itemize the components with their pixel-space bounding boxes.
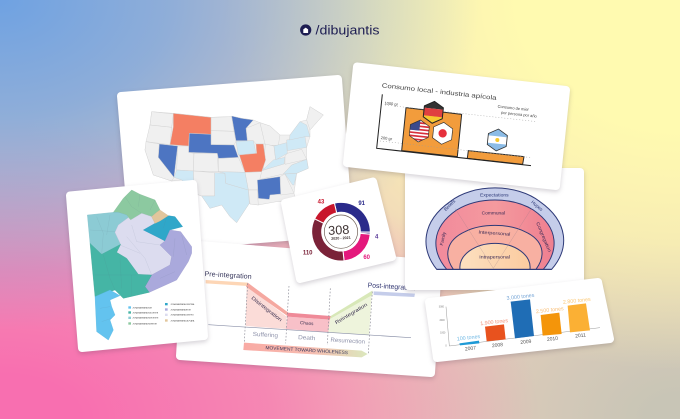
- card background: [405, 168, 584, 290]
- phase labels: Resurrection: [330, 338, 365, 346]
- icon: flag of Argentina: [486, 128, 508, 152]
- bar chart: [439, 293, 600, 353]
- value labels: 3.000 tones: [506, 293, 535, 302]
- phase labels: Pre-integration: [204, 271, 252, 281]
- map of the United States: [145, 107, 323, 223]
- panel: health regions map: [70, 184, 204, 348]
- ring labels: Hopes: [530, 200, 544, 213]
- value labels: 100 tones: [457, 334, 481, 343]
- map legend: ZONA SANITARIA LA PLATA: [171, 319, 195, 322]
- map legend: ZONA SANITARIA ESTE: [171, 308, 192, 311]
- card background: [347, 66, 566, 186]
- district boundaries: [90, 194, 187, 322]
- phase labels: Disintegration: [250, 296, 283, 323]
- arrow: movement toward wholeness: MOVEMENT TOWARD WHOLENESS: [265, 345, 348, 355]
- ring labels: Congregation: [535, 221, 552, 253]
- y axis labels: 0: [445, 346, 447, 348]
- phase labels: Suffering: [253, 332, 278, 339]
- ring labels: Communal: [482, 211, 505, 216]
- axis and note labels: 200 gr: [381, 135, 393, 141]
- phase labels: Reintegration: [334, 302, 369, 326]
- honey consumption chart: [377, 82, 538, 166]
- donut centre total: 308: [328, 223, 350, 238]
- arrow: movement toward wholeness: [243, 343, 368, 357]
- ring labels: Family: [439, 231, 447, 246]
- ring labels: [439, 192, 552, 260]
- consumption bars: [402, 108, 524, 164]
- donut value labels: 60: [363, 255, 371, 261]
- map legend: ZONA SANITARIA CENTRAL: [171, 303, 195, 306]
- y axis labels: 2000: [439, 320, 445, 322]
- panel: bar chart of yearly tonnes: [429, 282, 610, 358]
- icon: flag of the United States: [408, 119, 430, 143]
- ring labels: Interpersonal: [478, 230, 511, 237]
- panel: US map: [121, 79, 349, 249]
- card background: [70, 184, 204, 348]
- bars: [459, 299, 590, 345]
- card background: [285, 182, 392, 279]
- year labels: 2009: [520, 339, 532, 346]
- panel: donut chart: [285, 182, 392, 279]
- logo: /dibujantis: [300, 23, 380, 37]
- baseline and phase dividers: [208, 283, 411, 353]
- year labels: 2008: [492, 342, 504, 349]
- ring labels: Intrapersonal: [479, 255, 510, 260]
- map legend: ZONA SANITARIA NORESTE: [133, 322, 158, 325]
- donut segments: [312, 202, 370, 261]
- icon: logo badge: [300, 24, 311, 36]
- panel: local honey consumption: [347, 66, 566, 186]
- year labels: 2011: [575, 332, 586, 340]
- card background: [121, 79, 349, 249]
- phase labels: Chaos: [300, 320, 314, 326]
- donut chart: [303, 199, 379, 261]
- card background: [429, 282, 610, 358]
- y axis labels: 3000: [439, 307, 445, 309]
- process chart: [204, 271, 415, 357]
- axis and note labels: 1000 gr: [384, 100, 399, 107]
- panel: concentric circles: [405, 168, 584, 290]
- y axis labels: 1000: [440, 333, 446, 335]
- donut value labels: [303, 199, 379, 261]
- logo wordmark: /dibujantis: [316, 23, 380, 37]
- phase labels: Death: [298, 335, 316, 342]
- map legend: ZONA SANITARIA NOROESTE: [133, 317, 159, 320]
- phase bands: [206, 280, 415, 335]
- panel: integration process diagram: [180, 244, 438, 373]
- donut value labels: 110: [303, 250, 313, 256]
- year labels: 2007: [465, 345, 477, 353]
- icon: flag of Germany: [422, 100, 444, 125]
- year labels: [465, 332, 586, 353]
- year labels: 2010: [547, 336, 559, 343]
- donut value labels: 91: [358, 201, 366, 207]
- card background: [180, 244, 438, 373]
- value labels: 1.900 tones: [480, 318, 509, 327]
- phase labels: Post-integration: [368, 282, 415, 292]
- donut centre total: 2020 - 2021: [331, 236, 351, 241]
- chart title: Consumo local - industria apícola: [381, 82, 497, 102]
- axis and note labels: [381, 100, 538, 141]
- value labels: 2.500 tones: [536, 306, 564, 315]
- axis and note labels: Consumo de miel: [497, 104, 529, 112]
- chart axes: [446, 307, 600, 346]
- concentric dome diagram: [426, 188, 564, 269]
- value labels: 2.800 tones: [563, 297, 591, 306]
- regional map: [87, 190, 195, 340]
- donut centre total: [324, 215, 358, 248]
- map legend: ZONA SANITARIA SUR: [133, 306, 153, 309]
- map legend: ZONA SANITARIA CENTRO: [171, 314, 194, 317]
- phase labels: [204, 271, 415, 346]
- donut value labels: 43: [318, 199, 325, 205]
- axis and note labels: por persona por año: [501, 110, 538, 119]
- donut value labels: 4: [375, 234, 379, 240]
- value labels: [457, 293, 591, 343]
- ring labels: Beliefs: [443, 198, 457, 212]
- ring labels: Expectations: [480, 192, 509, 197]
- map legend: [128, 303, 195, 325]
- y axis labels: [439, 307, 447, 348]
- axes and reference lines: [377, 94, 537, 166]
- map legend: ZONA SANITARIA SUDOESTE: [133, 311, 159, 314]
- icon: flag of Japan: [432, 121, 453, 145]
